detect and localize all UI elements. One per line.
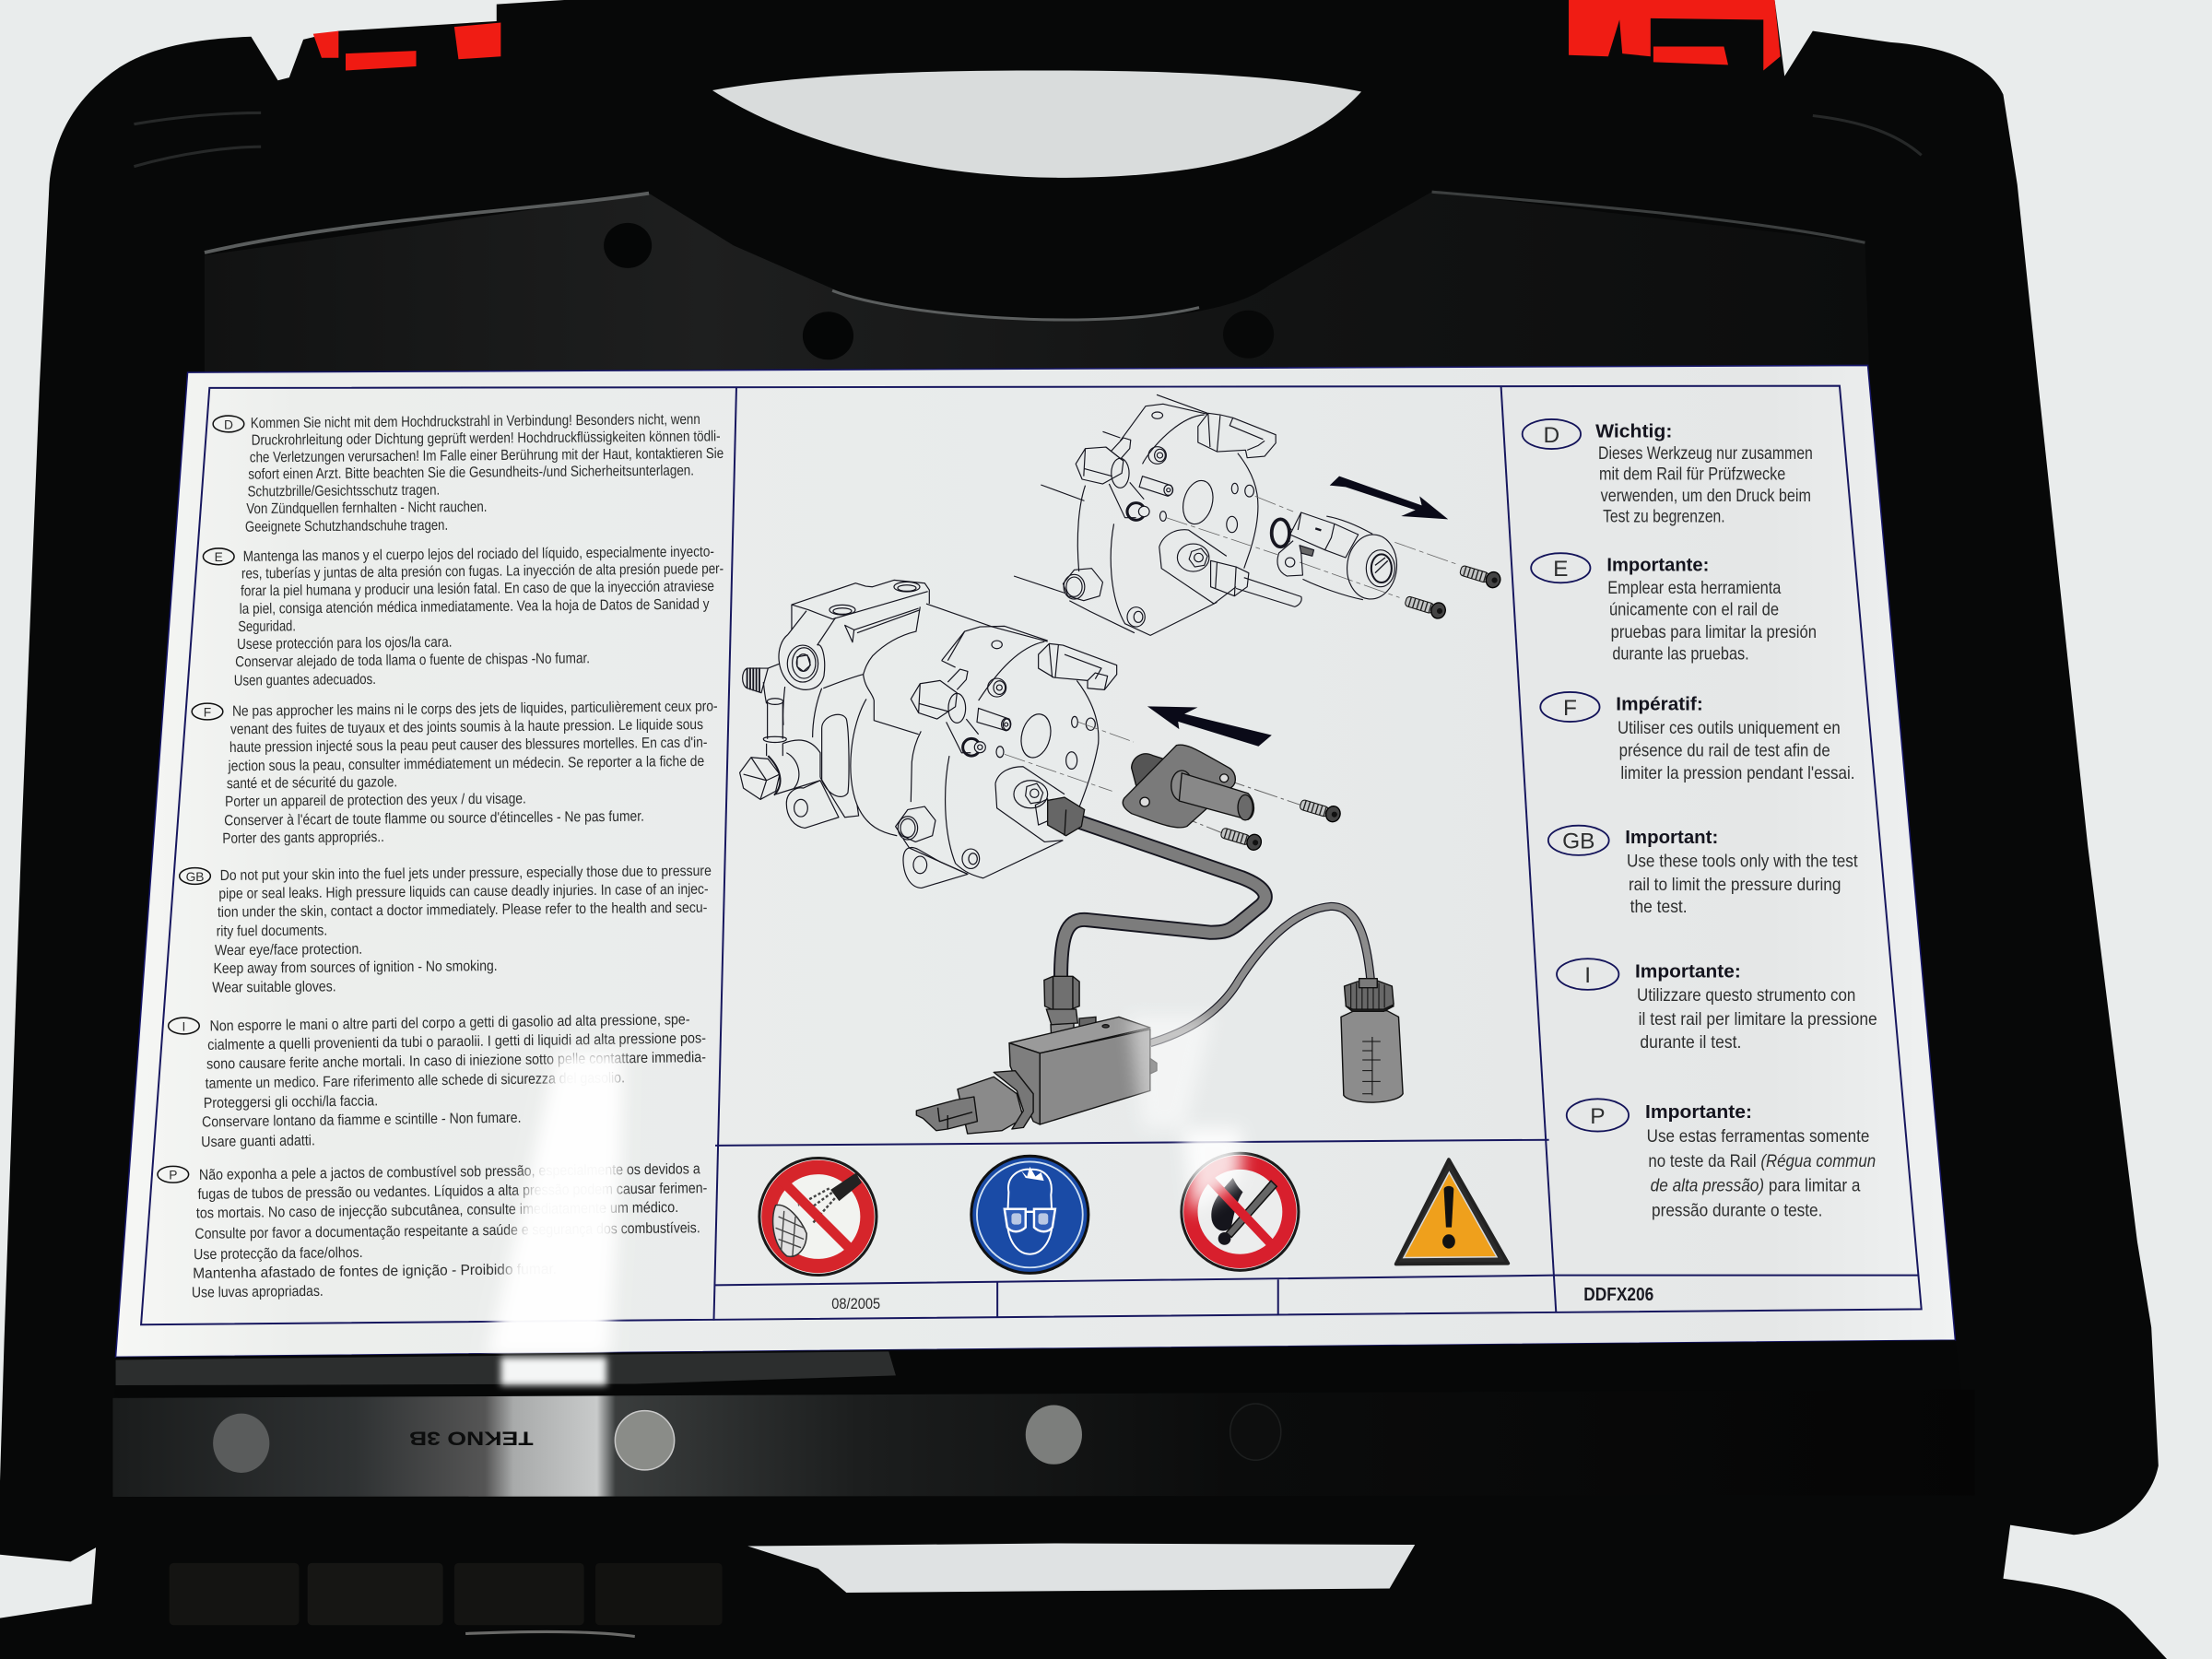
threaded fitting — [743, 664, 785, 725]
note E: pruebas para limitar la presión — [1611, 623, 1817, 642]
warning D: Geeignete Schutzhandschuhe tragen. — [245, 517, 448, 535]
note GB: Important: — [1625, 827, 1718, 848]
warning F: venant des fuites de tuyaux et des joints soumis à la haute pression. Le liquide sous — [230, 716, 703, 737]
warning GB: Wear eye/face protection. — [215, 941, 362, 959]
sheet frame lines — [141, 386, 1922, 1324]
test pipe — [1061, 820, 1265, 978]
warning P: tos mortais. No caso de injecção subcutânea, consulte imediatamente um médico. — [196, 1199, 678, 1221]
warning D: D — [224, 418, 233, 431]
note GB — [1548, 826, 1858, 917]
warning F: santé et de sécurité du gazole. — [227, 773, 397, 792]
warning P: Use protecção da face/olhos. — [194, 1244, 363, 1263]
note I: durante il test. — [1640, 1033, 1741, 1053]
inner tray panel — [134, 112, 1922, 381]
warning I: Non esporre le mani o altre parti del corpo a getti di gasolio ad alta pressione, spe- — [209, 1011, 690, 1034]
note P: de alta pressão) para limitar a — [1651, 1176, 1861, 1195]
warning D — [213, 411, 724, 535]
warning I — [169, 1011, 706, 1150]
warning D: Druckrohrleitung oder Dichtung geprüft werden! Hochdruckflüssigkeiten können tödli- — [252, 428, 721, 449]
warning E: Mantenga las manos y el cuerpo lejos del rociado del líquido, especialmente inyecto- — [243, 544, 714, 565]
note P: Use estas ferramentas somente — [1647, 1127, 1869, 1147]
note D: verwenden, um den Druck beim — [1601, 487, 1811, 506]
warning F: haute pression injecté sous la peau peut causer des blessures mortelles. En cas d'in- — [229, 735, 707, 756]
warning F: Ne pas approcher les mains ni le corps des jets de liquides, particulièrement ceux pro- — [232, 698, 718, 720]
warning I: Usare guanti adatti. — [201, 1132, 315, 1150]
warning E: forar la piel humana y producir una lesión fatal. En caso de que la inyección atraviese — [241, 578, 714, 599]
icon: no open flame — [1182, 1153, 1299, 1270]
note I: il test rail per limitare la pressione — [1639, 1010, 1877, 1030]
note GB: the test. — [1630, 898, 1688, 917]
flange screws — [1219, 796, 1342, 852]
part number: DDFX206 — [1583, 1284, 1653, 1305]
lower case rim — [112, 1340, 1975, 1497]
warning D: Von Zündquellen fernhalten - Nicht rauchen. — [246, 499, 488, 517]
note P: P — [1590, 1104, 1606, 1129]
warning P: Consulte por favor a documentação respeitante a saúde e segurança dos combustíveis. — [194, 1219, 700, 1242]
note F: F — [1563, 696, 1577, 721]
measuring bottle — [1341, 979, 1403, 1102]
warning I: Conservare lontano da fiamme e scintille - Non fumare. — [202, 1110, 522, 1130]
sheet — [116, 365, 1955, 1357]
icon: warning triangle — [1396, 1159, 1508, 1264]
note P: Importante: — [1645, 1101, 1752, 1123]
note D — [1523, 419, 1813, 526]
upper pump plate with solenoid removed — [1014, 394, 1301, 635]
note E — [1531, 553, 1817, 665]
warning GB: rity fuel documents. — [217, 922, 327, 940]
solenoid screws — [1404, 562, 1502, 620]
warning F: Porter un appareil de protection des yeux / du visage. — [225, 790, 526, 810]
panel: safety warnings text — [158, 411, 724, 1301]
warning D: che Verletzungen verursachen! Im Falle einer Berührung mit der Haut, kontaktieren Sie — [250, 445, 724, 465]
warning I: tamente un medico. Fare riferimento alle schede di sicurezza del gasolio. — [206, 1069, 625, 1092]
warning I: I — [182, 1020, 185, 1034]
note P: pressão durante o teste. — [1652, 1201, 1822, 1220]
note D: D — [1544, 423, 1559, 448]
arrow: removal direction — [1330, 477, 1448, 519]
warning E: res, tuberías y juntas de alta presión con fugas. La inyección de alta presión puede per- — [241, 560, 724, 582]
warning GB: GB — [186, 870, 204, 884]
pipe nut on pump — [1048, 797, 1085, 836]
glare on sheet — [487, 1016, 1241, 1357]
pressure limiter, hose and bottle — [916, 906, 1403, 1134]
warning GB: Do not put your skin into the fuel jets under pressure, especially those due to pressure — [220, 863, 712, 884]
gap behind hinge — [747, 1543, 1415, 1593]
lower pump assembly — [740, 580, 1134, 888]
note F: Utiliser ces outils uniquement en — [1618, 719, 1841, 738]
warning I: Proteggersi gli occhi/la faccia. — [204, 1092, 378, 1112]
warning GB — [180, 863, 712, 996]
outlet boss — [995, 767, 1065, 841]
warning F — [192, 698, 718, 847]
note I: Utilizzare questo strumento con — [1637, 986, 1855, 1006]
note D: Dieses Werkzeug nur zusammen — [1598, 444, 1813, 464]
note D: Wichtig: — [1595, 420, 1672, 441]
warning F: Conserver à l'écart de toute flamme ou source d'étincelles - Ne pas fumer. — [224, 808, 644, 829]
limiter plug — [916, 1071, 1033, 1134]
note GB: GB — [1562, 830, 1594, 854]
warning P: Mantenha afastado de fontes de ignição - Proibido fumar. — [193, 1261, 557, 1282]
housing outline — [813, 604, 1048, 836]
pump head — [779, 580, 929, 689]
warning E: Seguridad. — [238, 618, 296, 635]
note GB: Use these tools only with the test — [1627, 853, 1858, 872]
limiter block — [1009, 1017, 1157, 1124]
handle opening — [712, 71, 1361, 178]
icon: no spraying on hands — [759, 1158, 877, 1276]
note E: durante las pruebas. — [1612, 645, 1749, 665]
icon: wear eye protection — [971, 1156, 1088, 1273]
technical drawing: pump and test tool — [740, 394, 1502, 1134]
moulded case text: TEKNO 3B — [409, 1428, 534, 1450]
warning P: Use luvas apropriadas. — [192, 1283, 324, 1301]
warning E: la piel, consiga atención médica inmediatamente. Vea la hoja de Datos de Sanidad y — [240, 595, 710, 618]
warning D: sofort einen Arzt. Bitte beachten Sie die Gesundheits-/und Sicherheitsunterlagen. — [248, 462, 694, 483]
warning E: Conservar alejado de toda llama o fuente de chispas -No fumar. — [235, 650, 590, 670]
drain hose — [1150, 906, 1371, 1043]
solenoid valve — [1272, 512, 1399, 601]
warning E: Usen guantes adecuados. — [234, 671, 376, 689]
warning GB: pipe or seal leaks. High pressure liquids can cause deadly injuries. In case of an injec- — [218, 881, 709, 902]
warning E — [203, 544, 724, 689]
warning E: Usese protección para los ojos/la cara. — [237, 634, 453, 653]
warning I: sono causare ferite anche mortali. In caso di iniezione sotto pelle contattare immedia- — [206, 1049, 706, 1073]
warning P: fugas de tubos de pressão ou vedantes. Líquidos a alta pressão podem causar ferimen- — [197, 1180, 707, 1203]
date label: 08/2005 — [831, 1295, 880, 1312]
dash lines of solenoid — [1166, 496, 1458, 597]
arrow: fitting direction — [1147, 706, 1272, 747]
note D: mit dem Rail für Prüfzwecke — [1599, 465, 1785, 484]
warning P — [158, 1160, 707, 1301]
bracket and stud — [911, 669, 1011, 756]
red latch left — [313, 22, 500, 71]
warning GB: Wear suitable gloves. — [212, 978, 336, 996]
note E: E — [1553, 557, 1568, 582]
red latch right — [1569, 0, 1781, 71]
connector — [1039, 643, 1117, 689]
note I — [1557, 959, 1877, 1053]
flange — [1123, 745, 1253, 828]
note E: Importante: — [1606, 555, 1709, 576]
panel: important notes text — [1523, 419, 1877, 1220]
note I: Importante: — [1635, 960, 1741, 982]
note I: I — [1584, 963, 1591, 988]
note F: limiter la pression pendant l'essai. — [1620, 764, 1854, 783]
warning F: Porter des gants appropriés.. — [222, 829, 384, 847]
note GB: rail to limit the pressure during — [1629, 876, 1841, 895]
return tube and banjo bolt — [740, 699, 839, 828]
limiter fittings — [1044, 976, 1096, 1039]
drive nut and lug — [896, 806, 968, 888]
warning P: P — [169, 1169, 177, 1182]
note F: Impératif: — [1616, 694, 1703, 715]
note F: présence du rail de test afin de — [1619, 741, 1830, 760]
warning E: E — [215, 550, 223, 564]
note P: no teste da Rail (Régua commun — [1648, 1152, 1876, 1171]
warning F: jection sous la peau, consulter immédiatement un médecin. Se reporter a la fiche de — [228, 753, 704, 774]
warning F: F — [204, 706, 211, 720]
hinge knuckles — [170, 1563, 723, 1637]
note D: Test zu begrenzen. — [1603, 507, 1725, 526]
note F — [1540, 692, 1854, 783]
warning I: cialmente a quelli provenienti da tubi o paraolii. I getti di liquidi ad alta pressione pos- — [207, 1030, 706, 1053]
flange dash lines — [1142, 778, 1303, 834]
warning D: Kommen Sie nicht mit dem Hochdruckstrahl in Verbindung! Besonders nicht, wenn — [251, 411, 700, 431]
warning GB: tion under the skin, contact a doctor immediately. Please refer to the health and secu- — [218, 900, 707, 921]
flange adapter and arrow — [1123, 706, 1303, 834]
lower pump plate — [903, 626, 1099, 878]
note E: Emplear esta herramienta — [1607, 579, 1782, 598]
warning P: Não exponha a pele a jactos de combustível sob pressão, especialmente os devidos a — [199, 1160, 700, 1183]
plate dash lines — [1005, 722, 1134, 791]
warning GB: Keep away from sources of ignition - No smoking. — [213, 958, 498, 977]
warning D: Schutzbrille/Gesichtsschutz tragen. — [248, 482, 440, 500]
note P — [1567, 1099, 1876, 1220]
note E: únicamente con el rail de — [1609, 601, 1779, 620]
